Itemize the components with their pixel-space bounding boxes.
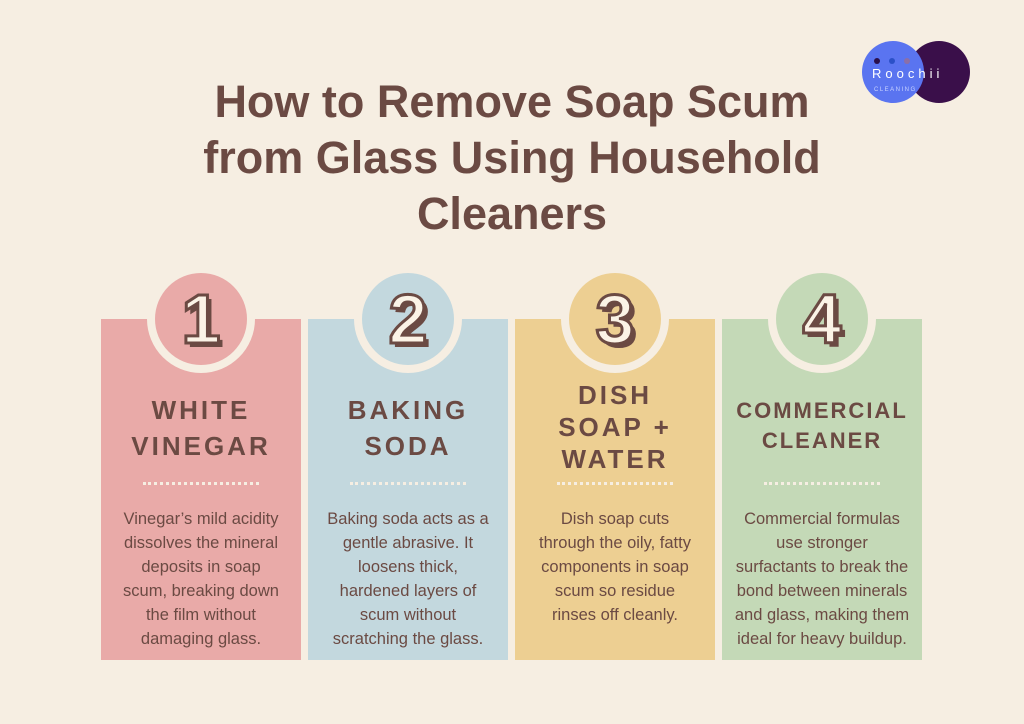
panel: commercial cleaner: CLEANER <box>762 428 882 453</box>
panel: commercial cleaner: ideal for heavy buildup. <box>737 630 907 648</box>
title: How to Remove Soap Scum <box>214 76 810 127</box>
title: Cleaners <box>417 188 607 239</box>
panel: commercial cleaner: Commercial formulas <box>744 510 900 528</box>
logo: Roochii <box>872 66 943 81</box>
panel: baking soda <box>308 319 508 660</box>
panel: white vinegar <box>101 319 301 660</box>
title: from Glass Using Household <box>203 132 821 183</box>
panel: dish soap: Dish soap cuts <box>561 510 669 528</box>
panel: white vinegar: VINEGAR <box>131 431 271 461</box>
panel: commercial cleaner: bond between minerals <box>737 582 907 600</box>
panel: dish soap: DISH <box>578 380 652 410</box>
panel: dish soap: scum so residue <box>555 582 675 600</box>
panel: baking soda: loosens thick, <box>358 558 458 576</box>
panel: dish soap: components in soap <box>541 558 689 576</box>
panel: baking soda: BAKING <box>348 395 468 425</box>
panel: commercial cleaner: use stronger <box>776 534 868 552</box>
panel: dish soap <box>515 319 715 660</box>
panel: white vinegar: scum, breaking down <box>123 582 279 600</box>
panel: white vinegar: the film without <box>146 606 256 624</box>
panel: baking soda: scum without <box>360 606 456 624</box>
panel: white vinegar: dissolves the mineral <box>124 534 278 552</box>
panel: baking soda: 2 <box>389 280 427 358</box>
panel: baking soda: SODA <box>364 431 452 461</box>
logo: CLEANING <box>874 87 917 93</box>
panel: white vinegar: Vinegar’s mild acidity <box>124 510 278 528</box>
panel: commercial cleaner: surfactants to break the <box>736 558 908 576</box>
panel: commercial cleaner <box>722 319 922 660</box>
panel: white vinegar: WHITE <box>152 395 250 425</box>
panel: dish soap: 3 <box>596 280 634 358</box>
panel: dish soap: SOAP + <box>558 412 672 442</box>
panel: baking soda: Baking soda acts as a <box>327 510 489 528</box>
panel: dish soap: WATER <box>562 444 668 474</box>
title <box>203 76 821 239</box>
panel: baking soda: scratching the glass. <box>333 630 483 648</box>
panel: commercial cleaner: and glass, making them <box>735 606 909 624</box>
panel: dish soap: rinses off cleanly. <box>552 606 678 624</box>
panel: white vinegar: damaging glass. <box>141 630 261 648</box>
panel: baking soda: hardened layers of <box>340 582 476 600</box>
panel: white vinegar: 1 <box>182 280 220 358</box>
logo <box>862 41 970 103</box>
panel: commercial cleaner: COMMERCIAL <box>736 398 908 423</box>
panel: white vinegar: deposits in soap <box>141 558 261 576</box>
panel: commercial cleaner: 4 <box>803 280 841 358</box>
panel: baking soda: gentle abrasive. It <box>343 534 473 552</box>
panel: dish soap: through the oily, fatty <box>539 534 691 552</box>
